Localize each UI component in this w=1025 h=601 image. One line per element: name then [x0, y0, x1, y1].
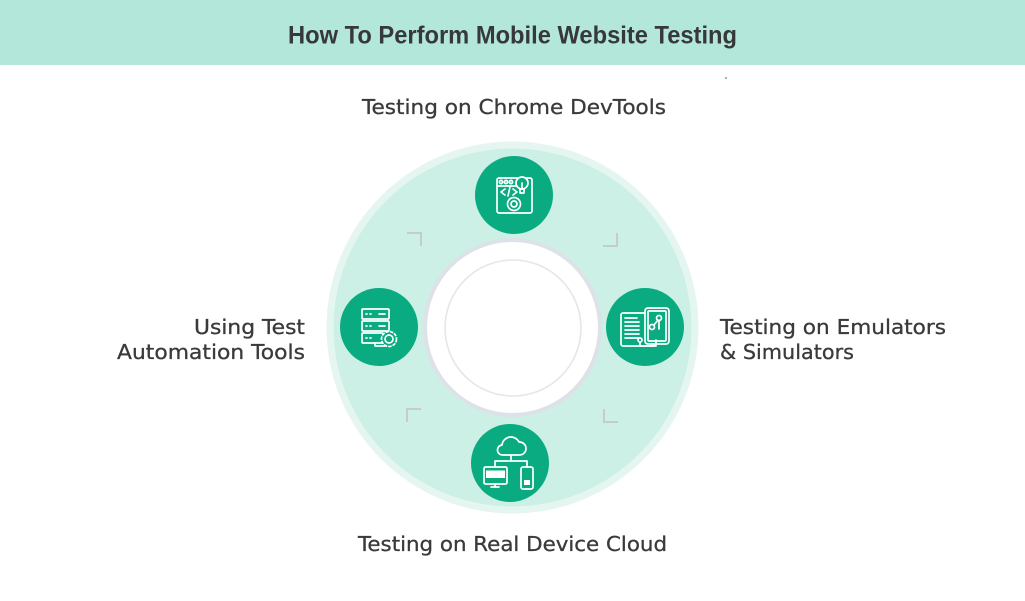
label: Testing on Emulators & Simulators: & Simulators: [720, 340, 854, 364]
label: Testing on Chrome DevTools: Testing on Chrome DevTools: [361, 95, 666, 119]
outer ring diagram: [326, 142, 698, 514]
small speck: [725, 77, 727, 79]
corner mark: top left: [407, 233, 421, 246]
label: Using Test Automation Tools: Automation Tools: [117, 340, 305, 364]
icon: emulator screen and phone: [606, 288, 684, 366]
icon: Chrome DevTools window with bulb and gear: [475, 156, 553, 234]
corner mark: top right: [603, 233, 617, 246]
icon: cloud connected to devices: [471, 424, 549, 502]
inner white disc: [427, 242, 598, 413]
label: Using Test Automation Tools: [117, 315, 305, 364]
icon: server rack with gear: [340, 288, 418, 366]
label: Using Test Automation Tools: Using Test: [194, 315, 305, 339]
inner grey ring: [423, 238, 602, 417]
label: Testing on Real Device Cloud: Testing on Real Device Cloud: [357, 532, 667, 556]
corner mark: bottom left: [407, 409, 421, 422]
label: Testing on Emulators & Simulators: Testing on Emulators: [719, 315, 946, 339]
corner mark: bottom right: [604, 409, 618, 422]
inner thin ring: [445, 260, 581, 396]
title: How To Perform Mobile Website Testing: [288, 22, 737, 50]
label: Testing on Emulators & Simulators: [719, 315, 946, 364]
header band: [0, 0, 1025, 65]
